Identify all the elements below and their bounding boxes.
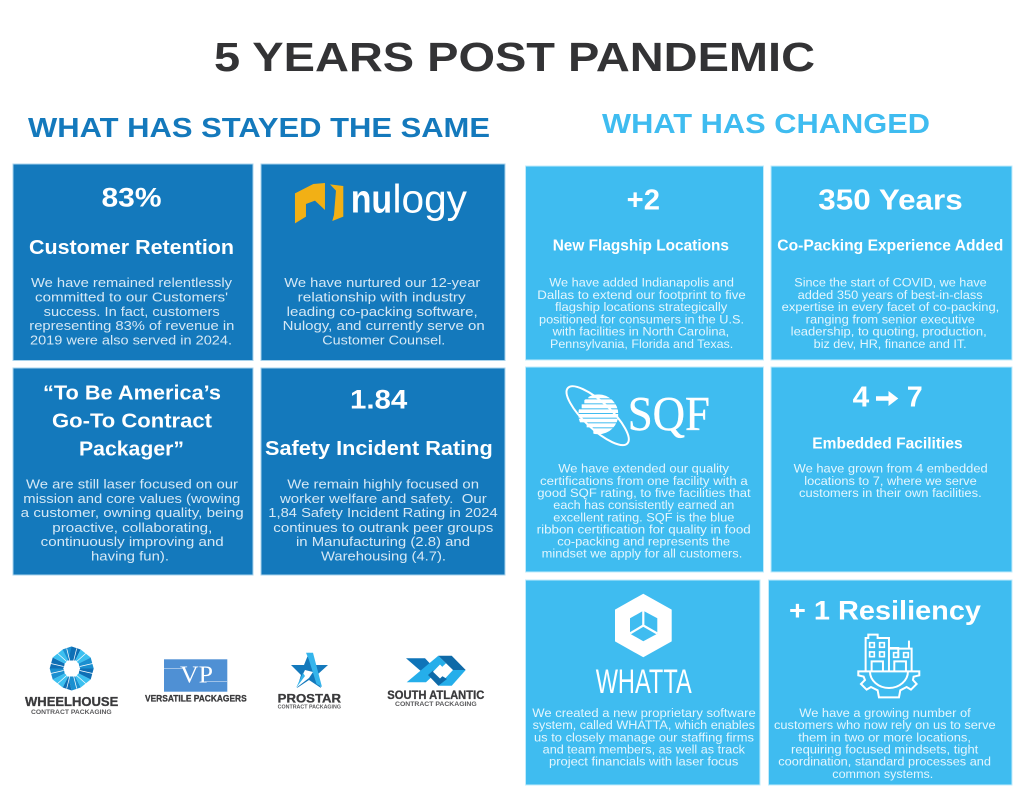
- body text: safety: worker welfare and safety. Our: [279, 491, 487, 506]
- logo: wheelhouse contract packaging: [25, 646, 119, 716]
- logo: nulogy: [295, 178, 467, 223]
- subheading: mission quote: “To Be America’s: [43, 381, 221, 404]
- logo: whatta: WHATTA: [596, 663, 692, 701]
- panel: sqf: [526, 367, 764, 572]
- subheading: customer retention: Customer Retention: [29, 237, 234, 259]
- panel: co-packing experience: [771, 166, 1012, 360]
- panel: embedded facilities: [771, 367, 1012, 572]
- icon: factory on gear: [858, 635, 919, 697]
- body text: flagship locations: Pennsylvania, Florida and Texas.: [550, 337, 733, 351]
- subheading: mission quote: Packager”: [79, 438, 184, 461]
- body text: mission: proactive, collaborating,: [52, 520, 212, 535]
- body text: mission: having fun).: [91, 548, 169, 564]
- stat: +1 resiliency: + 1 Resiliency: [789, 596, 981, 626]
- body text: flagship locations: positioned for consumers in the U.S.: [539, 312, 744, 326]
- body text: co-packing experience: biz dev, HR, finance and IT.: [814, 337, 967, 351]
- panel: resiliency: [768, 580, 1012, 785]
- body text: nulogy: relationship with industry: [298, 289, 466, 304]
- body text: sqf: good SQF rating, to five facilities that: [537, 486, 751, 500]
- body text: flagship locations: Dallas to extend our footprint to five: [537, 288, 746, 302]
- body text: mission: continuously improving and: [41, 534, 224, 549]
- body text: whatta: and team members, as well as track: [543, 742, 746, 756]
- subheading: mission quote: Go-To Contract: [52, 410, 212, 433]
- body text: embedded facilities: locations to 7, where we serve: [804, 474, 977, 488]
- logo: sqf: SQF: [628, 386, 710, 441]
- stat: 350 years: 350 Years: [818, 184, 963, 216]
- body text: co-packing experience: leadership, to quoting, production,: [791, 324, 987, 338]
- logo: versatile packagers: VERSATILE PACKAGERS: [145, 694, 247, 705]
- body text: nulogy: [283, 275, 485, 348]
- body text: sqf: mindset we apply for all customers.: [542, 547, 742, 561]
- logo: wheelhouse contract packaging: CONTRACT PACKAGING: [31, 710, 112, 716]
- logo: whatta: [596, 594, 692, 701]
- subheading: co-packing experience added: Co-Packing Experience Added: [777, 238, 1003, 255]
- body text: customer retention: committed to our Customers': [35, 289, 228, 304]
- body text: resiliency: requiring focused mindsets, tight: [791, 742, 979, 756]
- icon: sqf globe: [566, 385, 630, 446]
- body text: sqf: each has consistently earned an: [553, 498, 734, 512]
- body text: embedded facilities: customers in their own facilities.: [799, 486, 982, 500]
- body text: safety: Warehousing (4.7).: [321, 548, 446, 564]
- body text: sqf: We have extended our quality: [558, 462, 730, 476]
- body text: resiliency: We have a growing number of: [799, 706, 971, 720]
- panel: safety incident rating: [261, 368, 505, 575]
- body text: embedded facilities: We have grown from 4 embedded: [794, 462, 988, 476]
- body text: nulogy: leading co-packing software,: [287, 304, 478, 319]
- panel: new flagship locations: [526, 166, 764, 360]
- logo: versatile packagers: [145, 659, 247, 705]
- stat: 4 to 7: 7: [907, 382, 923, 414]
- body text: resiliency: coordination, standard processes and: [778, 755, 991, 769]
- body text: flagship locations: [537, 276, 746, 351]
- body text: whatta: system, called WHATTA, which enables: [533, 718, 755, 732]
- body text: nulogy: Nulogy, and currently serve on: [283, 318, 485, 333]
- body text: safety: in Manufacturing (2.8) and: [296, 534, 470, 549]
- heading: what has stayed the same: WHAT HAS STAYED THE SAME: [28, 112, 490, 143]
- logo: wheelhouse contract packaging: WHEELHOUSE: [25, 694, 119, 709]
- body text: sqf: ribbon certification for quality in food: [537, 523, 751, 537]
- body text: resiliency: them in two or more locations,: [798, 730, 971, 744]
- body text: mission: mission and core values (wowing: [23, 491, 240, 506]
- stat: 4 to 7: [853, 382, 923, 414]
- body text: co-packing experience: [782, 276, 999, 351]
- body text: embedded facilities: [794, 462, 988, 500]
- subheading: new flagship locations: New Flagship Locations: [553, 238, 729, 255]
- body text: whatta: We created a new proprietary software: [532, 706, 756, 720]
- panel: nulogy: [261, 164, 505, 360]
- body text: co-packing experience: added 350 years of best-in-class: [798, 288, 983, 302]
- body text: co-packing experience: Since the start of COVID, we have: [794, 276, 987, 290]
- body text: resiliency: customers who now rely on us to serve: [774, 718, 996, 732]
- panel: whatta: [526, 580, 760, 785]
- body text: sqf: [537, 462, 751, 561]
- stat: 1.84: 1.84: [350, 384, 407, 414]
- body text: whatta: us to closely manage our staffing firms: [534, 730, 754, 744]
- icon: wheelhouse hexagon burst: [50, 646, 94, 690]
- icon: south atlantic woven mark: [406, 656, 466, 686]
- body text: customer retention: success. In fact, customers: [44, 304, 220, 319]
- body text: flagship locations: flagship locations strategically: [555, 300, 728, 314]
- icon: prostar star: [291, 652, 328, 688]
- body text: nulogy: Customer Counsel.: [322, 333, 445, 348]
- logo: south atlantic contract packaging: SOUTH ATLANTIC: [387, 688, 485, 702]
- body text: sqf: excellent rating. SQF is the blue: [553, 510, 735, 524]
- body text: customer retention: 2019 were also served in 2024.: [30, 333, 232, 348]
- logo: south atlantic contract packaging: CONTRACT PACKAGING: [395, 701, 477, 708]
- logo: nulogy: logy: [392, 178, 467, 222]
- stat: +2: +2: [627, 184, 660, 216]
- title: 5 YEARS POST PANDEMIC: [214, 34, 815, 80]
- body text: mission: a customer, owning quality, being: [21, 505, 244, 520]
- body text: resiliency: common systems.: [832, 767, 933, 781]
- body text: customer retention: [29, 275, 234, 348]
- subheading: safety incident rating: Safety Incident Rating: [265, 438, 493, 460]
- body text: flagship locations: We have added Indianapolis and: [549, 276, 734, 290]
- body text: customer retention: representing 83% of revenue in: [29, 318, 234, 333]
- body text: whatta: [532, 706, 756, 769]
- body text: mission: [21, 476, 244, 564]
- body text: co-packing experience: expertise in every facet of co-packing,: [782, 300, 999, 314]
- logo: prostar contract packaging: PROSTAR: [278, 694, 342, 706]
- logo: sqf: [566, 385, 709, 446]
- icon: whatta hexagon cube: [615, 594, 672, 657]
- stat: 83%: 83%: [102, 183, 162, 213]
- body text: safety: 1,84 Safety Incident Rating in 2024: [268, 505, 498, 520]
- heading: what has changed: WHAT HAS CHANGED: [602, 108, 930, 139]
- body text: co-packing experience: ranging from senior executive: [806, 312, 975, 326]
- body text: sqf: certifications from one facility with a: [540, 474, 748, 488]
- body text: mission: We are still laser focused on our: [26, 476, 239, 492]
- body text: safety: We remain highly focused on: [287, 476, 479, 492]
- body text: whatta: project financials with laser focus: [549, 755, 738, 769]
- logo: nulogy: nu: [351, 178, 392, 222]
- icon: VP blue square: VP: [180, 662, 213, 688]
- body text: sqf: co-packing and represents the: [557, 535, 730, 549]
- body text: customer retention: We have remained relentlessly: [31, 275, 232, 290]
- body text: safety: [268, 476, 498, 564]
- panel: mission: [13, 368, 253, 575]
- logo: south atlantic contract packaging: [387, 656, 485, 708]
- subheading: mission quote: [43, 381, 221, 461]
- logo: prostar contract packaging: [278, 652, 342, 711]
- icon: arrow: [876, 391, 898, 406]
- body text: flagship locations: with facilities in North Carolina,: [552, 324, 729, 338]
- logo: prostar contract packaging: CONTRACT PACKAGING: [278, 705, 341, 711]
- panel: customer retention: [13, 164, 253, 360]
- body text: nulogy: We have nurtured our 12-year: [284, 275, 481, 290]
- body text: resiliency: [774, 706, 996, 781]
- subheading: embedded facilities: Embedded Facilities: [812, 435, 963, 452]
- body text: safety: continues to outrank peer groups: [273, 520, 494, 535]
- stat: 4 to 7: 4: [853, 382, 869, 414]
